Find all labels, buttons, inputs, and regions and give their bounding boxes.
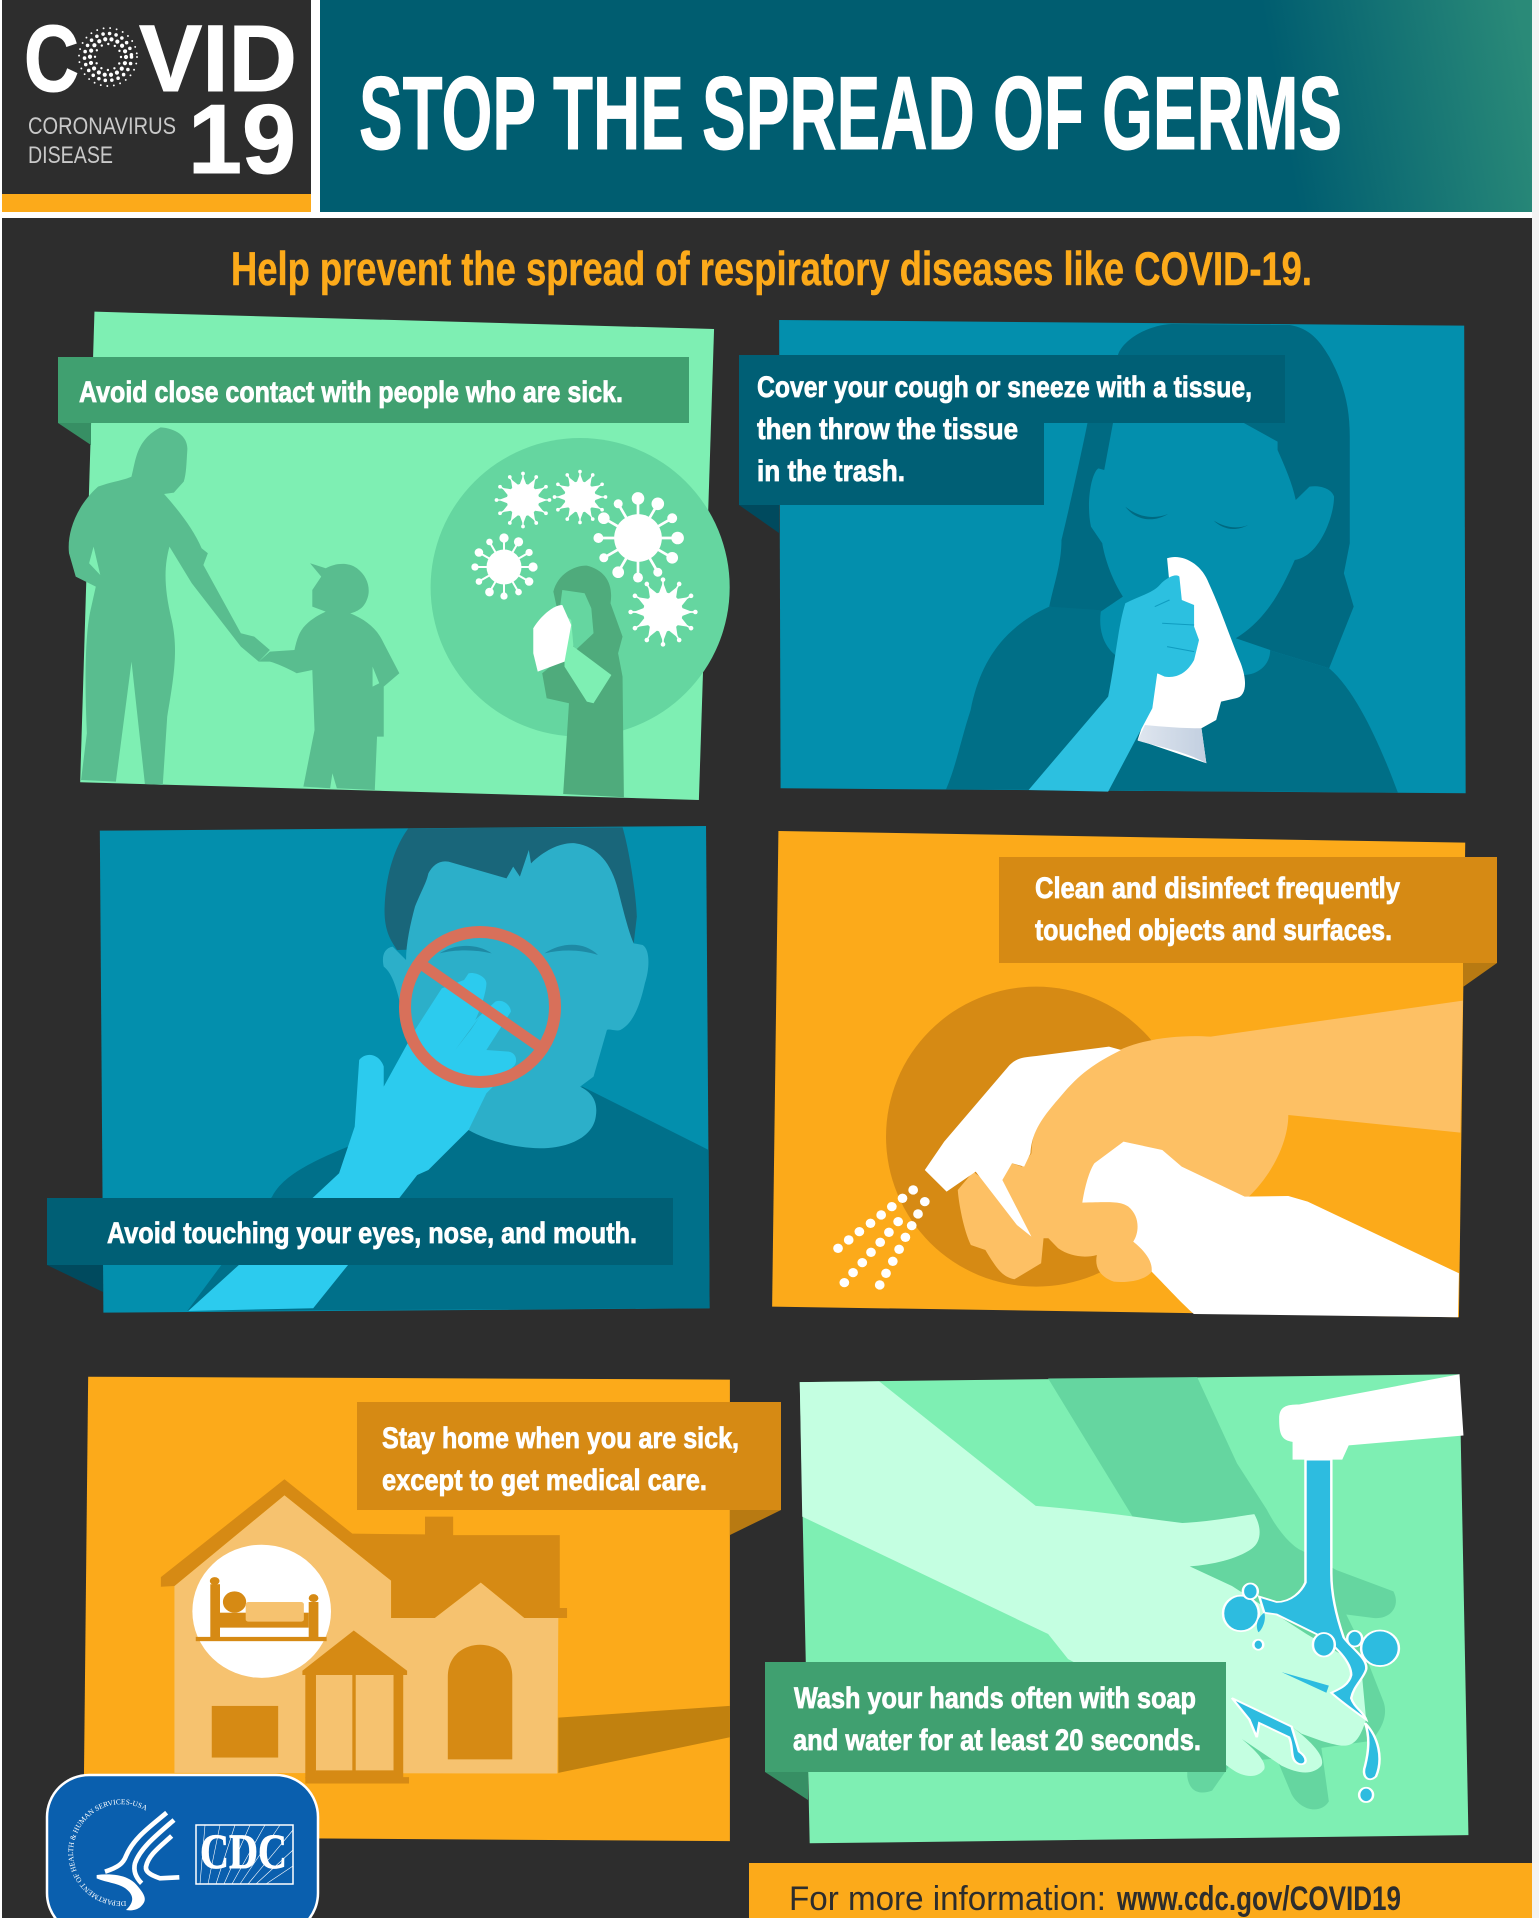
footer bar: www.cdc.gov/COVID19 — [1116, 1880, 1401, 1918]
COVID-19 logo block — [2, 0, 311, 212]
caption band — [765, 1662, 1226, 1800]
panel: stay home — [83, 1377, 781, 1841]
caption band: Clean and disinfect frequently — [1035, 872, 1400, 905]
logo: HHS and CDC badge: DEPARTMENT OF HEALTH & HUMAN SERVICES-USA — [68, 1799, 146, 1906]
caption band — [357, 1402, 781, 1535]
caption band — [999, 857, 1497, 987]
logo: HHS and CDC badge — [46, 1774, 320, 1918]
spray droplets — [833, 1185, 930, 1290]
caption band: in the trash. — [757, 455, 905, 488]
panel: cover your cough — [739, 320, 1466, 793]
caption band: Avoid close contact with people who are sick. — [79, 376, 623, 409]
illustration: hands under faucet — [800, 1374, 1468, 1843]
caption band: then throw the tissue — [757, 413, 1018, 446]
illustration: house with bed — [83, 1377, 730, 1841]
caption band: Cover your cough or sneeze with a tissue, — [757, 371, 1252, 404]
caption band: Wash your hands often with soap — [794, 1682, 1196, 1715]
icon: CDC box: CDC — [200, 1823, 287, 1879]
icon: bed — [196, 1577, 327, 1641]
footer bar: For more information: — [789, 1880, 1106, 1918]
panel: avoid touching face — [47, 826, 710, 1313]
caption band: touched objects and surfaces. — [1035, 914, 1392, 947]
caption band — [47, 1198, 673, 1292]
illustration: adult and child silhouettes — [69, 312, 730, 800]
caption band: Stay home when you are sick, — [382, 1422, 739, 1455]
icon: dotted virus letter O — [79, 28, 137, 86]
caption band: Avoid touching your eyes, nose, and mouth. — [107, 1217, 637, 1250]
footer bar — [749, 1863, 1532, 1918]
caption band — [58, 357, 689, 445]
caption band: and water for at least 20 seconds. — [793, 1724, 1201, 1757]
illustration: hand with spray bottle — [772, 831, 1465, 1317]
icons: germs — [471, 470, 698, 647]
icon: prohibition sign — [405, 932, 555, 1082]
porch — [302, 1630, 409, 1784]
title banner — [320, 0, 1532, 212]
COVID-19 logo block: 19 — [188, 84, 296, 194]
panel: clean and disinfect — [772, 831, 1497, 1317]
panel: wash hands — [765, 1374, 1468, 1843]
caption band — [739, 355, 1285, 533]
icon: HHS eagle — [97, 1813, 179, 1910]
COVID-19 logo block: CORONAVIRUS — [28, 113, 176, 140]
COVID-19 logo block: DISEASE — [28, 142, 113, 169]
COVID-19 logo block: C — [24, 6, 79, 112]
panel: avoid close contact — [58, 312, 730, 800]
COVID-19 logo block: VID — [139, 6, 297, 112]
caption band: except to get medical care. — [382, 1464, 707, 1497]
water — [1223, 1460, 1399, 1802]
illustration: woman sneezing into tissue — [779, 320, 1466, 793]
illustration: man touching face — [100, 826, 710, 1313]
